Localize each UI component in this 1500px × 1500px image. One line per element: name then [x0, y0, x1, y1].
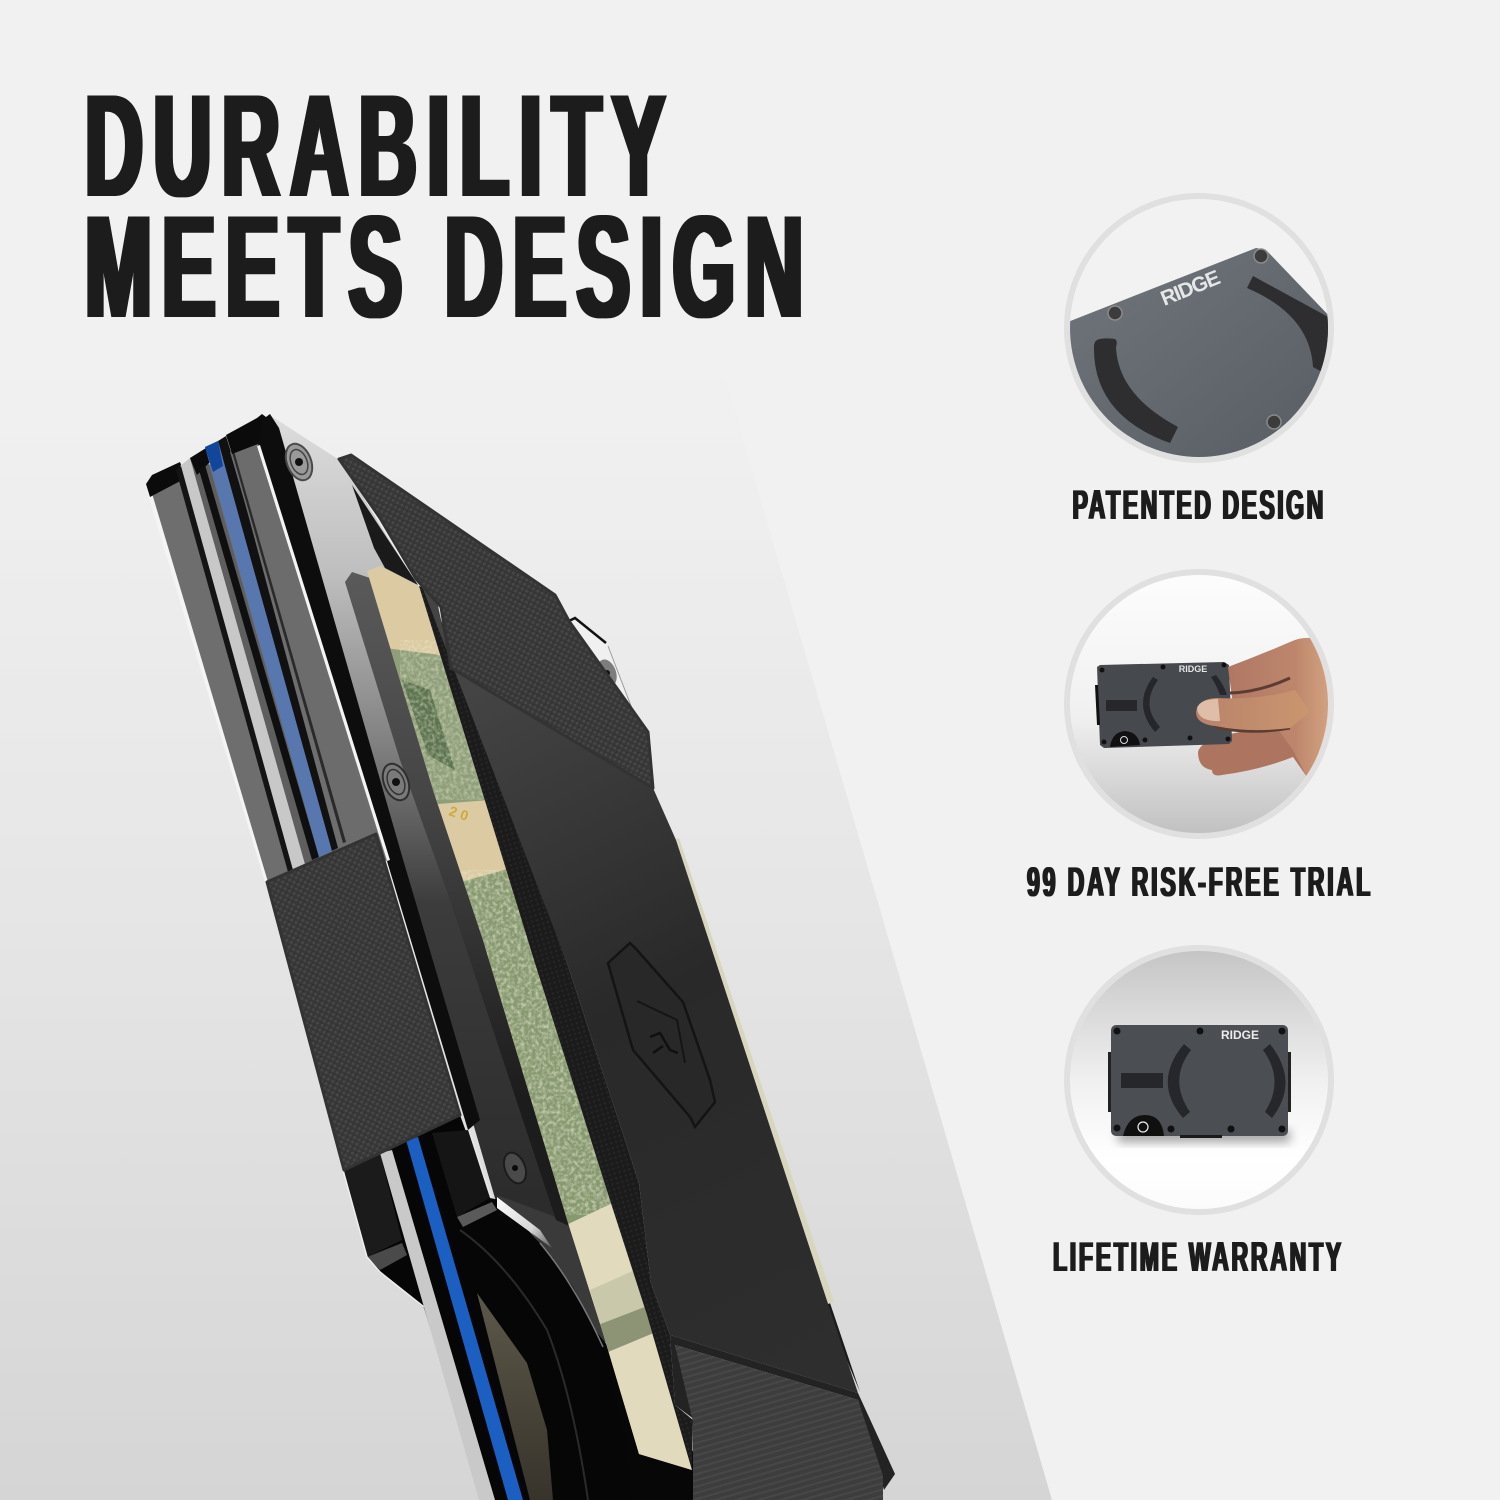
left end cap [146, 462, 186, 497]
ring highlight [497, 1197, 552, 1248]
circle thumbnail: wallet plate: RIDGE [1158, 266, 1224, 311]
outer dark edge and cream card stripe [653, 788, 860, 1392]
side elastic band [267, 834, 460, 1170]
leather pocket [423, 589, 858, 1393]
plate face [257, 414, 606, 1350]
wallet product illustration [146, 414, 895, 1500]
title: MEETS DESIGN [85, 184, 803, 348]
feature: warranty [1053, 948, 1341, 1281]
wallet card [1095, 662, 1232, 748]
feature: patented design [1060, 196, 1340, 529]
label: PATENTED DESIGN [1072, 482, 1323, 529]
title: DURABILITY [85, 63, 665, 227]
thin white line lower [468, 1130, 492, 1198]
left block [343, 1153, 402, 1257]
right block [432, 1130, 490, 1217]
far plate corner with screw [566, 618, 640, 730]
black filler below bill [595, 1330, 700, 1500]
lower fingers behind card [1198, 731, 1320, 776]
top elastic band [339, 455, 653, 788]
blue stripe [406, 1137, 523, 1500]
circle thumbnail: hand holding wallet [1067, 572, 1340, 836]
banknote [367, 566, 700, 1480]
finger shadow [1215, 678, 1290, 731]
screw lower [500, 1149, 530, 1187]
lower metal body [343, 1115, 630, 1500]
banknote: 2 0 [447, 803, 471, 824]
screw middle [378, 760, 414, 804]
inner disc [477, 1293, 553, 1500]
thin white edge line [257, 445, 390, 861]
embossed hexagon logo [608, 943, 715, 1127]
label: 99 DAY RISK-FREE TRIAL [1027, 859, 1370, 906]
diagonal grey backdrop [0, 0, 1052, 1500]
plate edge strip [258, 414, 480, 1130]
right end cap [226, 414, 270, 454]
screw top [281, 440, 317, 484]
plate lower corner behind ring [497, 1195, 606, 1350]
title [85, 63, 803, 348]
circle thumbnail: wallet front: RIDGE [1221, 1028, 1259, 1042]
silver stripe [380, 1150, 495, 1500]
bottom strap [675, 1345, 883, 1500]
wallet card: RIDGE [1179, 664, 1207, 674]
metal side face with stripes [146, 414, 390, 884]
label: LIFETIME WARRANTY [1053, 1234, 1341, 1281]
channel groove [345, 572, 569, 1226]
circle thumbnail: wallet plate [1060, 196, 1340, 470]
circle thumbnail: wallet front [1067, 948, 1331, 1212]
dark shadow under top band [352, 485, 418, 585]
thumb [1196, 690, 1310, 730]
fabric strip beside bill [419, 586, 693, 1470]
feature: trial [1027, 572, 1370, 906]
thumbnail nail [1197, 699, 1220, 721]
hand back and index finger [1228, 638, 1328, 776]
black leather tail [670, 1335, 895, 1490]
